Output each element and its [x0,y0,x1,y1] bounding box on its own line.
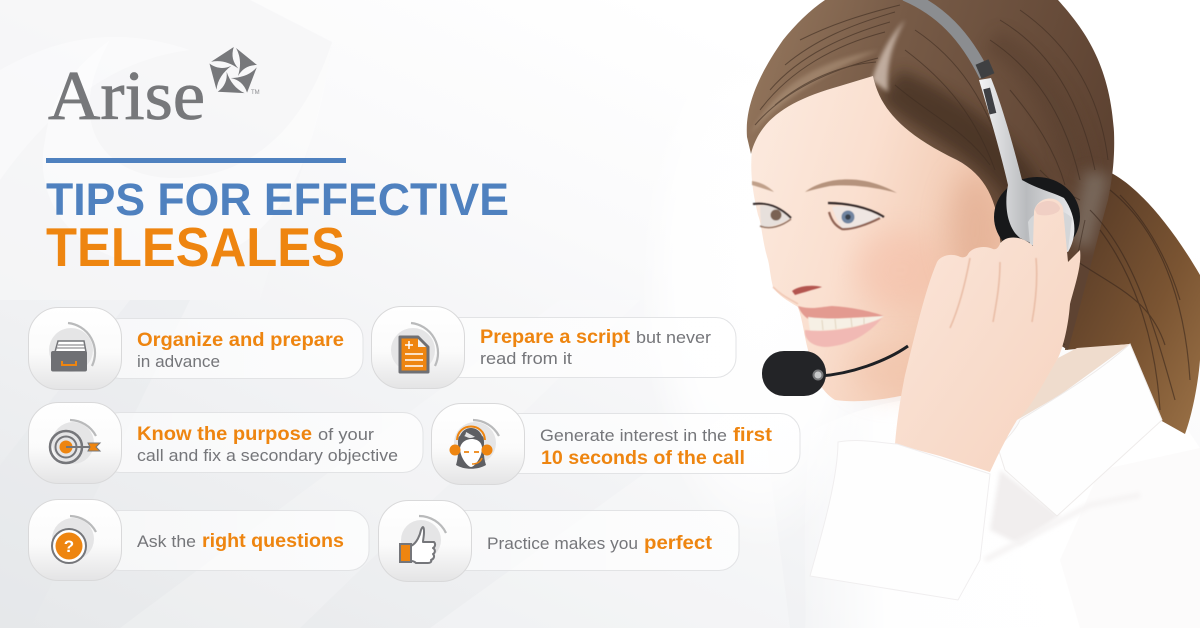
icon: file drawer [49,323,95,372]
decorative rule [46,158,346,163]
text: 10 seconds of the call [541,448,745,469]
ponytail [1065,170,1200,434]
icon: question mark: ? [64,537,74,556]
title [46,174,509,278]
logo: Arise: TM [251,90,260,96]
icon: script document [391,323,438,372]
text: Ask the [137,533,196,551]
logo: Arise: Arise [48,58,205,135]
icon: thumbs up [400,516,446,563]
title: TELESALES [46,216,345,278]
icon: pinwheel mark [199,42,263,106]
icon: question mark [52,516,96,563]
text: Prepare a script [480,327,631,348]
icon: agent with headset [450,420,499,469]
text: Know the purpose [137,424,312,445]
text: right questions [202,531,344,552]
text: Organize and prepare [137,330,344,351]
eyes [753,203,884,229]
card: ask the right questions [28,500,369,580]
neck [1017,344,1130,420]
microphone [762,346,908,396]
text [487,533,713,554]
text: perfect [644,533,713,554]
headset [905,0,1080,257]
text [540,425,773,469]
card: know the purpose [28,402,423,484]
card: organize and prepare [28,308,363,390]
shirt body [805,345,1200,628]
eyebrows [805,179,897,193]
text [137,330,344,371]
logo: Arise [48,42,263,135]
photo: woman with headset [747,0,1200,628]
face [751,76,1001,401]
title: TIPS FOR EFFECTIVE [46,174,509,225]
card: prepare a script [372,306,736,388]
nose [792,286,822,295]
mouth [798,306,884,347]
text [137,531,344,552]
ear pad [994,177,1080,257]
text: in advance [137,353,220,371]
hair [747,0,1190,410]
speaker arm [979,78,1074,252]
hand [895,199,1080,472]
text [480,327,712,368]
card: practice makes you perfect [378,500,739,582]
headband [905,0,985,76]
text: Practice makes you [487,535,638,553]
text [137,424,398,465]
cheek blush [855,230,945,310]
shirt collar [998,344,1162,516]
text: first [733,425,773,446]
text: but never [636,329,712,347]
icon: target and arrow [50,420,100,464]
text: read from it [480,350,572,368]
shirt cuff [810,440,990,600]
text: of your [318,426,375,444]
card: generate interest [432,404,800,484]
text: Generate interest in the [540,427,727,445]
text: call and fix a secondary objective [137,447,398,465]
